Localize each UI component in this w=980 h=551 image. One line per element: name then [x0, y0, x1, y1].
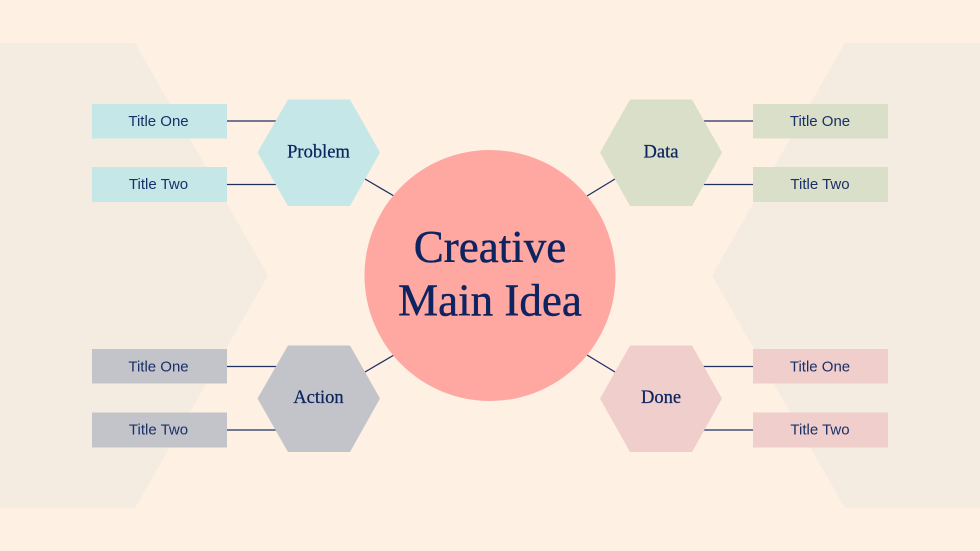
central title: Main Idea: [398, 276, 582, 326]
label: Data: Data: [644, 142, 678, 162]
text: Title Two: Title Two: [129, 422, 188, 438]
hexagon: Done: [600, 346, 722, 452]
label: Action: Action: [293, 388, 344, 408]
box: Title Two: [92, 167, 227, 202]
hexagon: Problem: [258, 100, 380, 206]
box: Title Two: [753, 412, 888, 448]
text: Title One: Title One: [790, 113, 850, 130]
text: Title One: Title One: [128, 358, 189, 376]
branch: Problem: [92, 100, 380, 206]
box: Title One: [753, 349, 888, 384]
background hexagon: left: [0, 43, 268, 508]
text: Title Two: Title Two: [790, 176, 850, 193]
box: Title One: [753, 104, 888, 138]
box: Title One: [92, 104, 227, 138]
hexagon: Data: [600, 100, 722, 206]
background hexagon: right: [712, 43, 980, 508]
text: Title Two: Title Two: [129, 176, 188, 193]
text: Title One: Title One: [128, 113, 189, 130]
text: Title Two: Title Two: [790, 422, 850, 438]
central title: Creative: [414, 222, 566, 272]
branch: Data: [600, 100, 888, 206]
connector lines: [227, 121, 753, 430]
box: Title Two: [753, 167, 888, 202]
hexagon: Action: [258, 346, 380, 452]
branch: Done: [600, 346, 888, 452]
label: Problem: Problem: [287, 142, 350, 162]
label: Done: Done: [641, 388, 681, 408]
central circle: Creative Main Idea: [364, 150, 616, 401]
box: Title One: [92, 349, 227, 384]
branch: Action: [92, 346, 380, 452]
box: Title Two: [92, 412, 227, 448]
text: Title One: Title One: [790, 358, 850, 376]
